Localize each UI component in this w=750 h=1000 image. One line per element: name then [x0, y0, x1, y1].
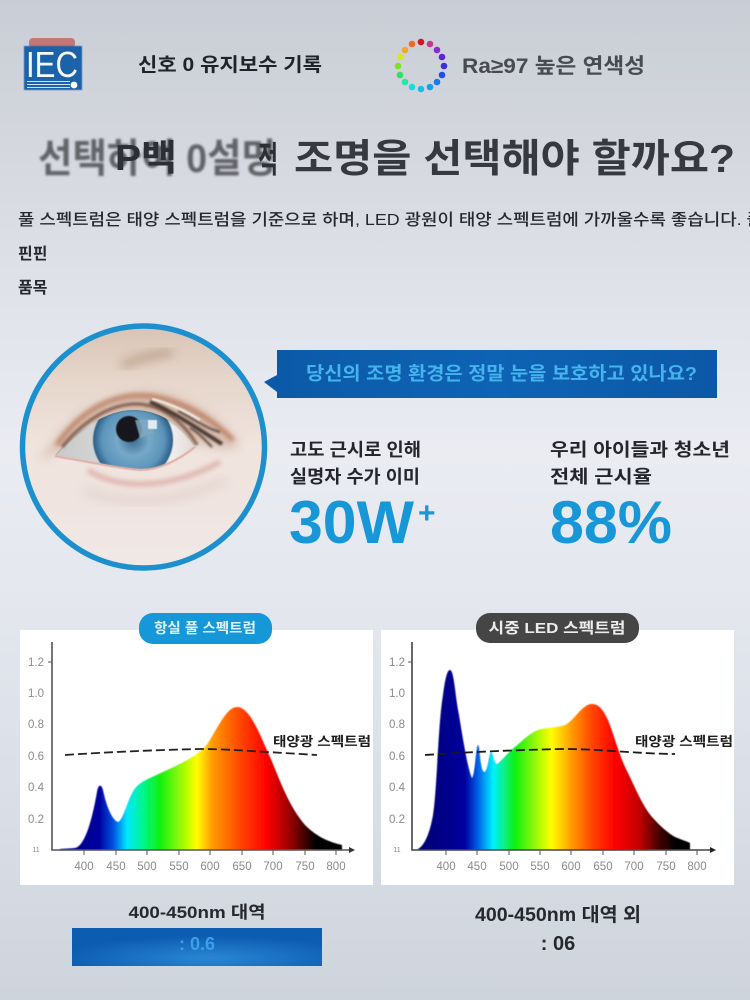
pill: full spectrum label — [139, 613, 272, 644]
pill: commercial LED label: 시중 LED 스펙트럼 — [488, 620, 626, 637]
stat: 300k blind from high myopia: 고도 근시로 인해 — [290, 440, 421, 460]
pill: commercial LED label — [476, 613, 639, 643]
panel: full spectrum chart: 0.8 — [28, 719, 44, 731]
panel: full spectrum chart: 700 — [263, 861, 283, 873]
panel: full spectrum chart: 750 — [295, 861, 315, 873]
title: which lighting to choose: 조명을 선택해야 할까요? — [294, 138, 735, 181]
panel: full spectrum chart: 1.0 — [28, 688, 44, 700]
panel: commercial LED spectrum chart: 450 — [467, 861, 487, 873]
panel: full spectrum chart: 450 — [106, 861, 126, 873]
panel: commercial LED spectrum chart: 1.0 — [389, 688, 405, 700]
panel: commercial LED spectrum chart — [381, 630, 734, 885]
callout banner: protecting your eyes — [264, 350, 717, 398]
stat: 300k blind from high myopia — [289, 440, 436, 556]
label: pinpin: 핀핀 — [18, 245, 47, 263]
panel: commercial LED spectrum chart: 태양광 스펙트럼 — [635, 734, 733, 749]
panel: commercial LED spectrum chart: 0.4 — [389, 782, 406, 794]
title: which lighting to choose: 적 — [258, 139, 278, 180]
panel: commercial LED spectrum chart: 500 — [499, 861, 519, 873]
panel: full spectrum chart: 0.6 — [28, 751, 44, 763]
callout banner: protecting your eyes: 당신의 조명 환경은 정말 눈을 보호하고 있나요? — [306, 363, 697, 384]
caption: left band: 400-450nm 대역 — [128, 903, 266, 922]
panel: commercial LED spectrum chart: 0.2 — [389, 814, 405, 826]
stat: 300k blind from high myopia: 실명자 수가 이미 — [290, 467, 420, 487]
panel: commercial LED spectrum chart: 1.2 — [389, 657, 405, 669]
panel: full spectrum chart: 500 — [137, 861, 157, 873]
label: item: 품목 — [18, 280, 48, 297]
stat: 88% youth myopia: 88% — [550, 489, 672, 556]
value bar: 0.6 — [72, 928, 322, 966]
stat: 300k blind from high myopia: + — [418, 497, 436, 530]
panel: commercial LED spectrum chart: 400 — [436, 861, 456, 873]
panel: full spectrum chart: 550 — [169, 861, 189, 873]
panel: commercial LED spectrum chart: 550 — [530, 861, 550, 873]
header text: maintenance record: 신호 0 유지보수 기록 — [138, 54, 322, 76]
image: eye in circle — [22, 326, 264, 568]
panel: commercial LED spectrum chart: 600 — [561, 861, 581, 873]
icon: colour rendering ring — [395, 39, 447, 92]
panel: full spectrum chart: 1.2 — [28, 657, 44, 669]
panel: commercial LED spectrum chart: 750 — [656, 861, 676, 873]
value bar: 0.6: : 0.6 — [179, 934, 215, 954]
caption: right band: 400-450nm 대역 외 — [475, 904, 641, 926]
panel: full spectrum chart: 400 — [74, 861, 94, 873]
panel: full spectrum chart: 11 — [32, 847, 40, 854]
stat: 300k blind from high myopia: 30W — [289, 489, 414, 556]
panel: full spectrum chart — [20, 630, 373, 885]
panel: full spectrum chart: 600 — [200, 861, 220, 873]
panel: commercial LED spectrum chart: 800 — [687, 861, 707, 873]
panel: commercial LED spectrum chart: 11 — [393, 847, 401, 854]
stat: 88% youth myopia — [550, 440, 730, 556]
stat: 88% youth myopia: 우리 아이들과 청소년 — [550, 440, 730, 460]
stat: 88% youth myopia: 전체 근시율 — [550, 467, 652, 487]
intro text line: 풀 스펙트럼은 태양 스펙트럼을 기준으로 하며, LED 광원이 태양 스펙트럼에 가까울수록 좋습니다. 풀 — [18, 211, 750, 229]
panel: commercial LED spectrum chart: 700 — [624, 861, 644, 873]
panel: full spectrum chart: 800 — [326, 861, 346, 873]
panel: commercial LED spectrum chart: 0.8 — [389, 719, 405, 731]
header text: colour rendering index: Ra≥97 높은 연색성 — [462, 55, 645, 78]
panel: full spectrum chart: 650 — [232, 861, 252, 873]
panel: full spectrum chart: 0.2 — [28, 814, 44, 826]
title: which lighting to choose: 선택하여 0설명 — [38, 137, 276, 181]
panel: commercial LED spectrum chart: 0.6 — [389, 751, 405, 763]
pill: full spectrum label: 항실 풀 스펙트럼 — [154, 620, 256, 636]
value text: 06: : 06 — [541, 933, 575, 955]
panel: full spectrum chart: 태양광 스펙트럼 — [273, 734, 371, 749]
panel: full spectrum chart: 0.4 — [28, 782, 45, 794]
title: which lighting to choose: P백 — [115, 137, 177, 178]
icon: IEC certification logo: IEC — [26, 44, 78, 85]
panel: commercial LED spectrum chart: 650 — [593, 861, 613, 873]
title: which lighting to choose — [38, 137, 735, 181]
